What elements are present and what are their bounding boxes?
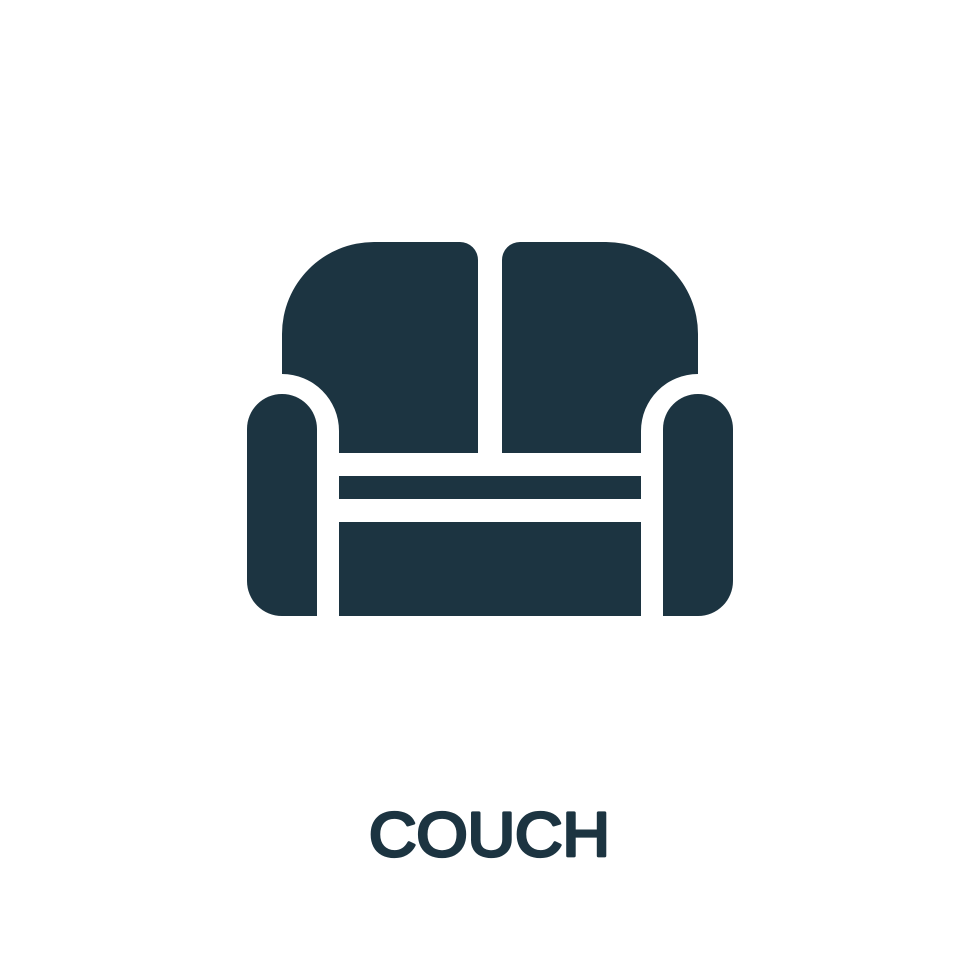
icon: couch (247, 242, 733, 616)
left back cushion (282, 242, 478, 453)
seat base (339, 522, 641, 616)
title: COUCH (369, 800, 610, 870)
seat front stripe (339, 476, 641, 499)
right back cushion (502, 242, 698, 453)
right armrest (663, 394, 733, 616)
left armrest (247, 394, 317, 616)
